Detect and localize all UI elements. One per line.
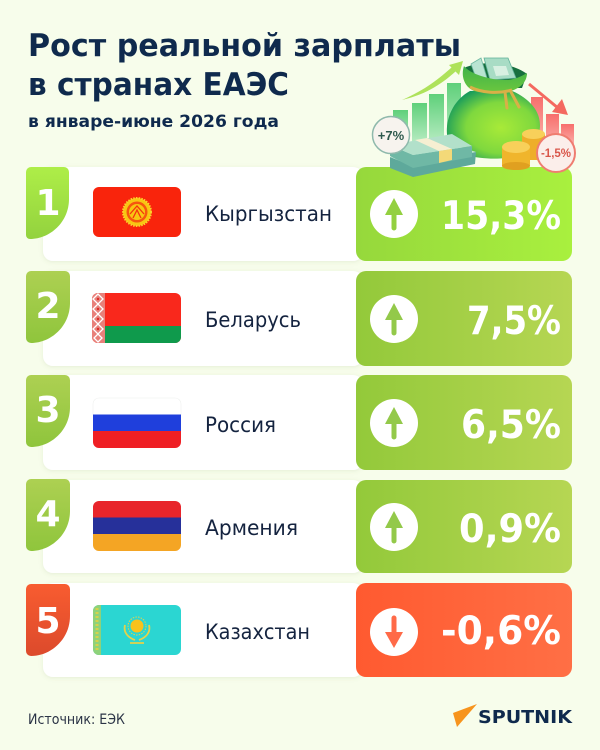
badge: +7%	[372, 116, 410, 154]
subtitle: в январе-июне 2026 года	[28, 112, 279, 131]
flag: Kazakhstan	[93, 605, 181, 655]
value: 7,5%	[467, 299, 561, 344]
icon: Sputnik wing	[453, 704, 477, 727]
value panel	[356, 167, 572, 261]
flag: Belarus	[92, 293, 181, 343]
title: Рост реальной зарплаты	[28, 28, 461, 64]
value: -0,6%	[441, 609, 561, 654]
badge: -1,5%: -1,5%	[541, 148, 571, 160]
icon: green up arrow	[402, 61, 463, 100]
icon: up arrow	[370, 295, 418, 343]
value panel	[356, 271, 572, 366]
row 3 card: Russia	[26, 375, 572, 470]
icon: down arrow	[370, 608, 418, 656]
badge: +7%: +7%	[378, 128, 405, 143]
icon: up arrow	[370, 503, 418, 551]
row 5 card: Kazakhstan	[26, 583, 572, 677]
row 1 card: Kyrgyzstan	[26, 167, 572, 261]
flag: Russia	[93, 398, 181, 448]
row 2 card: Belarus	[26, 271, 572, 366]
icon: rising green bars	[393, 83, 461, 142]
value: 0,9%	[459, 507, 561, 552]
source: Источник: ЕЭК	[28, 712, 126, 728]
icon: up arrow	[370, 190, 418, 238]
wordmark: SPUTNIK	[478, 707, 573, 728]
row 4 rank tab	[26, 479, 70, 551]
value: 6,5%	[461, 403, 561, 448]
value: 15,3%	[441, 194, 561, 239]
row 1 white card	[43, 167, 363, 261]
logo: Sputnik	[453, 704, 573, 728]
icon: falling red bars	[531, 97, 574, 148]
row 1 rank tab	[26, 167, 69, 239]
row 3 white card	[43, 375, 363, 470]
country name: Кыргызстан	[205, 202, 332, 226]
country name: Армения	[205, 516, 298, 540]
row 4 card: Armenia	[26, 479, 572, 573]
row 2 rank tab: 2	[35, 286, 61, 327]
row 2 white card	[43, 271, 363, 366]
country name: Беларусь	[205, 308, 301, 332]
country name: Россия	[205, 413, 276, 437]
row 2 rank tab	[26, 271, 70, 343]
value panel	[356, 583, 572, 677]
flag: Kyrgyzstan	[93, 187, 181, 237]
icon: money bag	[447, 58, 540, 159]
row 5 rank tab	[26, 584, 70, 656]
title	[28, 28, 461, 103]
row 4 white card	[43, 480, 363, 573]
row 3 rank tab: 3	[35, 390, 61, 431]
value panel	[356, 480, 572, 573]
row 5 rank tab: 5	[35, 601, 61, 642]
badge: -1,5%	[537, 134, 575, 172]
flag: Armenia	[93, 501, 181, 551]
illustration: money bag and charts	[372, 58, 575, 177]
icon: cash stacks	[390, 134, 476, 177]
row 3 rank tab	[26, 375, 70, 447]
row 5 white card	[43, 583, 363, 677]
row 1 rank tab: 1	[35, 183, 61, 224]
icon: red down arrow	[529, 84, 568, 115]
country name: Казахстан	[205, 620, 310, 644]
icon: up arrow	[370, 399, 418, 447]
title: в странах ЕАЭС	[28, 67, 289, 103]
value panel	[356, 375, 572, 470]
row 4 rank tab: 4	[35, 494, 61, 535]
icon: gold coins	[502, 129, 545, 170]
